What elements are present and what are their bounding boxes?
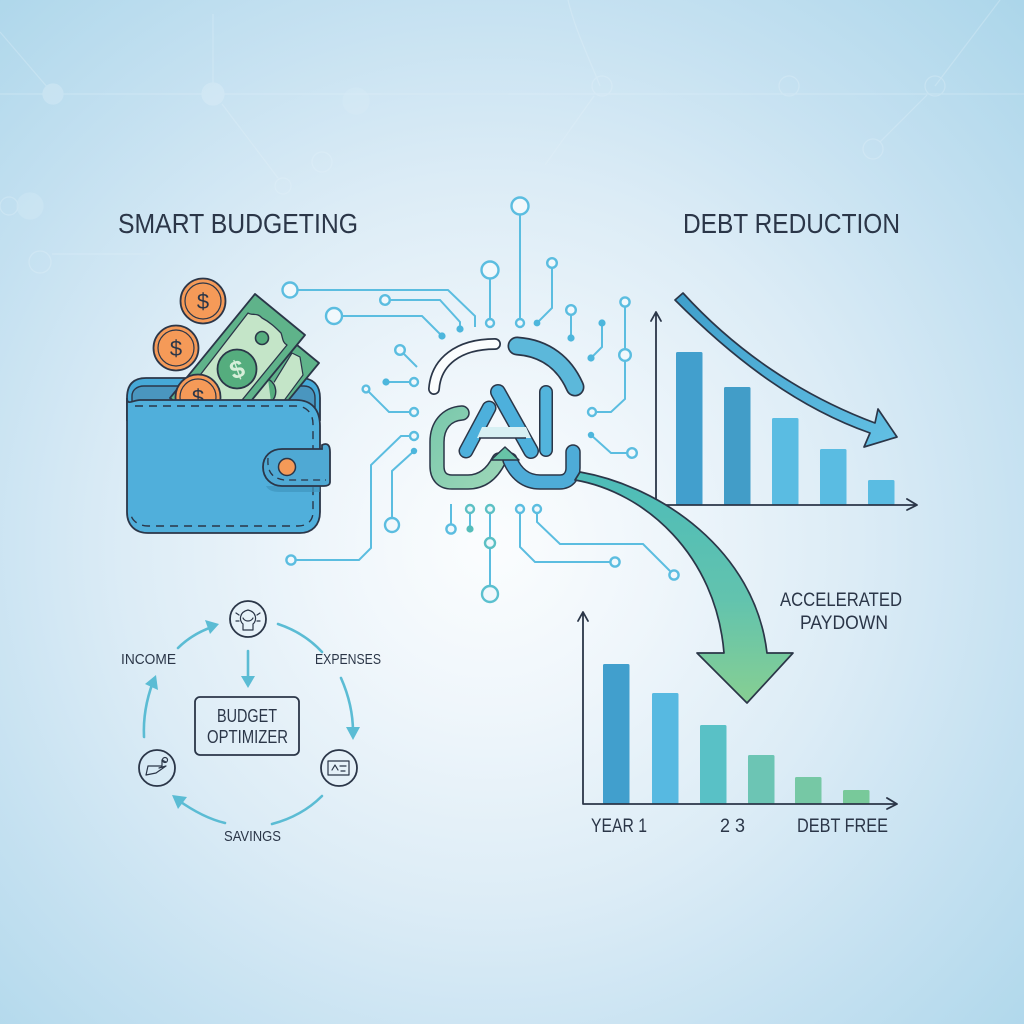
icon: banknotes and coin in wallet [169, 293, 320, 400]
logo: blue arc [517, 346, 575, 387]
budget optimizer cycle [121, 601, 381, 845]
icon: banknotes and coin in wallet: $ [192, 385, 204, 410]
budget optimizer box [195, 697, 299, 755]
bars [603, 664, 870, 804]
AI logo [434, 344, 575, 482]
budget optimizer box: BUDGET [217, 706, 277, 726]
budget optimizer box: OPTIMIZER [207, 727, 288, 747]
label: expenses: EXPENSES [315, 651, 381, 668]
icon: wallet back [127, 378, 320, 420]
label: savings: SAVINGS [224, 828, 281, 845]
icon: coins: $ [170, 336, 182, 361]
debt chart bottom: DEBT FREE [797, 816, 888, 837]
logo: green loop [437, 413, 499, 482]
icon: coins: $ [197, 289, 209, 314]
circuit network around AI [282, 198, 679, 602]
front bill: $ [226, 354, 249, 385]
axes [651, 312, 917, 510]
icon: lightbulb [230, 601, 266, 637]
green accelerated arrow [575, 472, 793, 703]
back bill [254, 344, 320, 400]
axes [578, 612, 897, 809]
logo: up arrowhead [491, 447, 519, 460]
label: accelerated paydown: ACCELERATED [780, 590, 902, 611]
heading: smart budgeting: SMART BUDGETING [118, 208, 358, 239]
heading: debt reduction: DEBT REDUCTION [683, 208, 900, 239]
logo: white arc [434, 344, 495, 389]
label: income: INCOME [121, 651, 176, 668]
background network pattern [0, 0, 1024, 273]
icon: coins [154, 278, 226, 370]
cycle arrows [144, 620, 360, 824]
logo: letter I [539, 392, 553, 450]
axis labels: YEAR 1 [591, 816, 647, 837]
debt chart bottom [578, 612, 897, 837]
front bill [169, 293, 306, 400]
label: accelerated paydown: PAYDOWN [800, 613, 888, 634]
debt chart top [651, 293, 917, 510]
icon: chart screen [321, 750, 357, 786]
bars [676, 352, 894, 505]
icon: hand with money [139, 750, 175, 786]
logo: letter A [466, 392, 531, 451]
label: accelerated paydown [780, 590, 902, 634]
logo: blue loop [510, 452, 573, 482]
icon: wallet front [127, 398, 330, 533]
debt chart bottom: 2 3 [720, 816, 745, 837]
downward blue arrow [675, 293, 897, 447]
